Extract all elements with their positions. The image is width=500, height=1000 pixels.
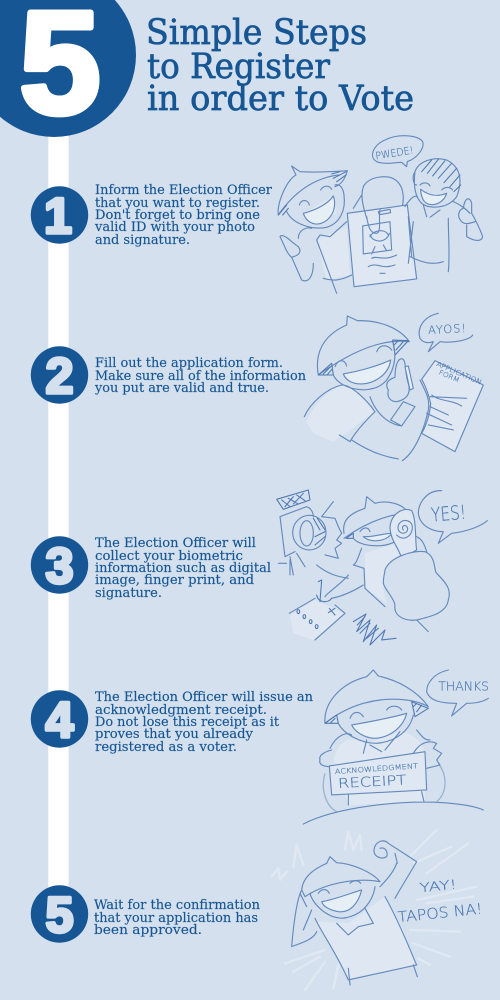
step 3 text: The Election Officer will — [95, 536, 256, 551]
step 5 text: been approved. — [94, 923, 202, 938]
step 1 text: Inform the Election Officer — [95, 183, 273, 198]
step 3 text: information such as digital — [95, 561, 271, 576]
speech bubble: AYOS! — [428, 321, 467, 337]
step 2 illustration: filling out the form — [304, 313, 483, 461]
speech bubble: PWEDE! — [375, 145, 414, 162]
step 5 text: Wait for the confirmation — [94, 898, 260, 913]
step 1 text: valid ID with your photo — [94, 220, 255, 235]
step 4 text: Do not lose this receipt as it — [95, 715, 280, 730]
step 2 number — [31, 346, 88, 404]
speech bubble — [373, 136, 423, 167]
step 4 text — [95, 690, 313, 755]
camera — [277, 490, 342, 575]
step 4 text: The Election Officer will issue an — [95, 690, 313, 705]
step 4 text: proves that you already — [95, 727, 253, 742]
step 2 number: 2 — [46, 348, 73, 404]
application form: APPLICATION — [435, 360, 483, 386]
step 1 text — [94, 183, 273, 248]
step 1 text: and signature. — [95, 233, 190, 248]
application form — [422, 360, 483, 452]
step 4 illustration: receipt — [303, 670, 489, 824]
exclamation — [397, 876, 483, 926]
step 5 text — [94, 898, 260, 938]
step 3 text: signature. — [95, 586, 162, 601]
title: to Register — [147, 47, 330, 87]
title — [146, 13, 414, 119]
exclamation: YAY! — [419, 876, 457, 895]
step 2 text: Make sure all of the information — [95, 369, 306, 384]
form with ID photo — [347, 205, 417, 287]
application form: FORM — [438, 368, 461, 384]
step 2 text — [94, 356, 306, 396]
step 4 text: acknowledgment receipt. — [95, 703, 267, 718]
step 4 number: 4 — [46, 692, 74, 748]
step 3 text: image, finger print, and — [95, 573, 254, 588]
fingerprint hand — [390, 509, 427, 558]
title: Simple Steps — [146, 13, 367, 53]
fingerprint card — [289, 598, 345, 640]
step 5 text: that your application has — [94, 911, 258, 926]
step 1 number: 1 — [44, 188, 72, 244]
step 5 number — [31, 885, 88, 943]
step 4 number — [31, 690, 88, 748]
step 4 text: registered as a voter. — [95, 740, 237, 755]
speech bubble — [418, 491, 487, 543]
speech bubble: THANKS — [438, 679, 489, 694]
title: in order to Vote — [147, 79, 414, 119]
step 3 number — [31, 536, 88, 594]
step 1 text: that you want to register. — [95, 196, 260, 211]
receipt sign — [329, 752, 427, 795]
speech bubble — [419, 313, 473, 352]
step 3 text — [95, 536, 271, 601]
step 3 text: collect your biometric — [95, 549, 243, 564]
receipt sign: ACKNOWLEDGMENT — [335, 762, 419, 776]
big number badge — [0, 0, 136, 144]
step 2 text: Fill out the application form. — [95, 356, 283, 371]
speech bubble: YES! — [430, 501, 467, 527]
vertical timeline bar — [48, 130, 69, 890]
receipt sign: RECEIPT — [338, 773, 407, 792]
step 5 illustration: celebrating voter — [272, 830, 483, 990]
exclamation: TAPOS NA! — [397, 900, 483, 926]
step 2 text: you put are valid and true. — [94, 381, 269, 396]
speech bubble — [427, 670, 489, 716]
step 3 number: 3 — [46, 538, 73, 594]
step 3 illustration: biometrics capture — [277, 490, 487, 645]
step 5 number: 5 — [46, 887, 73, 943]
step 1 number — [31, 186, 88, 244]
step 1 text: Don't forget to bring one — [95, 208, 260, 223]
step 1 illustration: two voters with ID form — [278, 136, 483, 293]
